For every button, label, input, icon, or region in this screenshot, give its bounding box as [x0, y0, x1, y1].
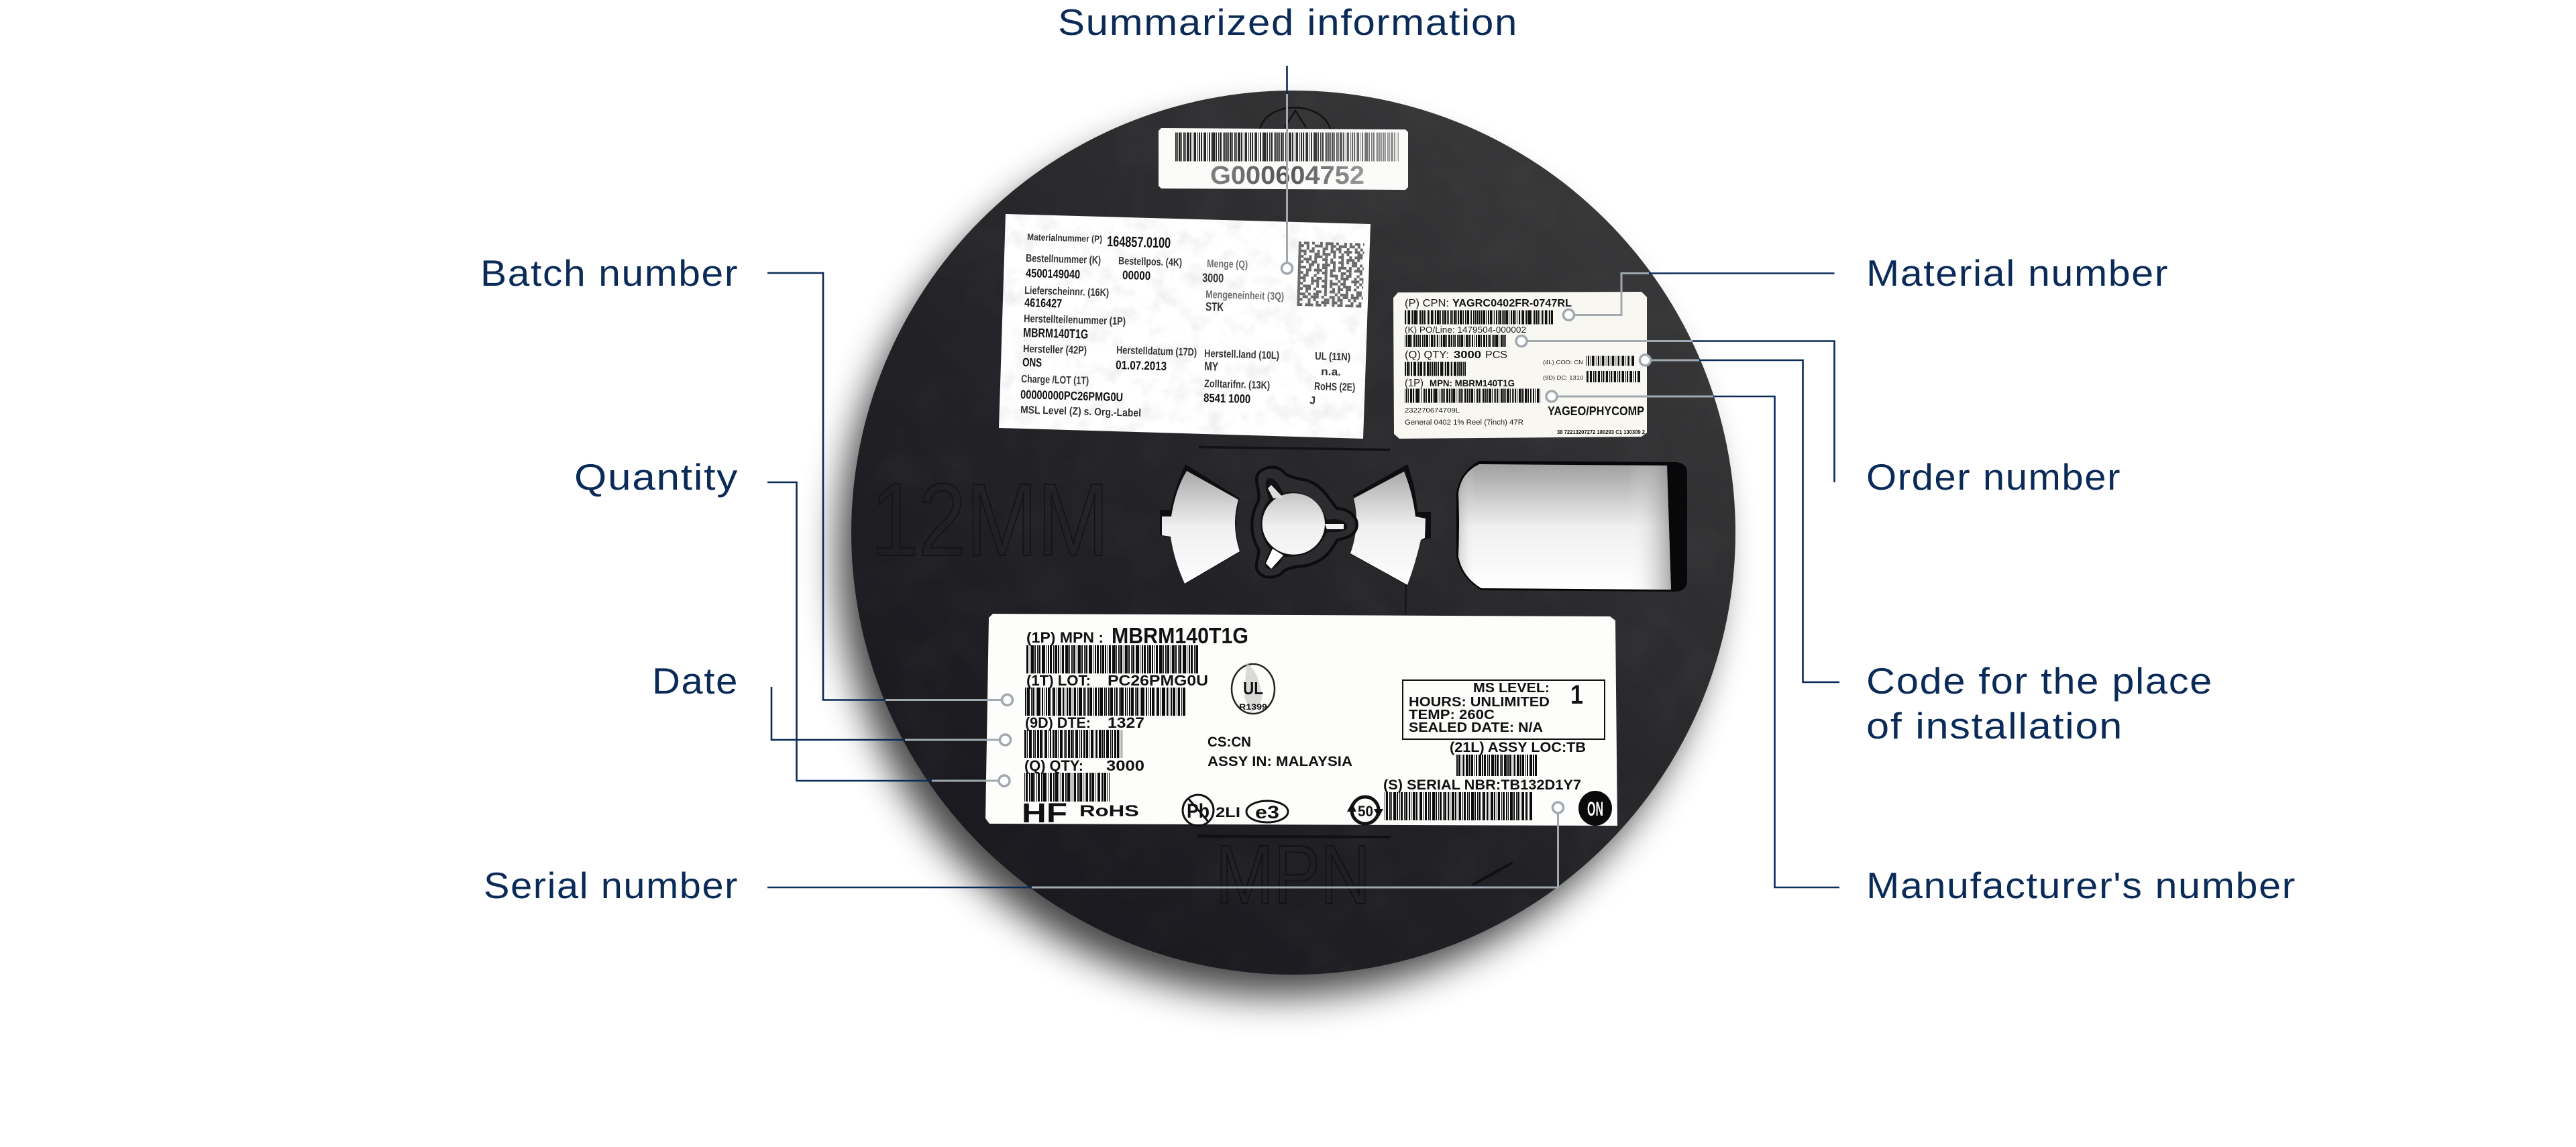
right Yageo label: 38 72213207272 180293 C1 130309 2 — [1557, 429, 1646, 435]
right Yageo label: (P) CPN: — [1405, 298, 1449, 309]
crack in reel — [1405, 585, 1406, 614]
left German delivery label: Menge (Q) — [1207, 258, 1248, 271]
callout line: Quantity — [767, 482, 1010, 786]
bottom manufacturer label: (S) SERIAL NBR:TB132D1Y7 — [1383, 777, 1581, 793]
bottom manufacturer label: 3000 — [1106, 757, 1144, 774]
moisture sensitivity box: HOURS: UNLIMITED — [1409, 695, 1550, 710]
left German delivery label: 3000 — [1202, 271, 1224, 285]
callout line: Serial number — [767, 802, 1563, 887]
left German delivery label: 00000 — [1122, 268, 1150, 282]
engraved text: MPN: MPN — [1216, 829, 1371, 922]
bottom manufacturer label: 2LI — [1216, 805, 1240, 820]
left German delivery label: MBRM140T1G — [1023, 326, 1088, 342]
label: Serial number: Serial number — [484, 865, 739, 906]
engraved arch at top — [1260, 107, 1330, 129]
left German delivery label: 8541 1000 — [1203, 391, 1250, 406]
left German delivery label: MSL Level (Z) s. Org.-Label — [1020, 404, 1141, 419]
moisture sensitivity box: 1 — [1570, 680, 1583, 710]
left German delivery label: RoHS (2E) — [1314, 381, 1355, 394]
bottom manufacturer label: (1P) MPN : — [1026, 629, 1104, 646]
left German delivery label: 4500149040 — [1026, 266, 1080, 281]
right Yageo label — [1393, 292, 1647, 439]
callout line: Manufacturer's number — [1546, 391, 1839, 887]
data matrix code — [1297, 243, 1364, 307]
moisture sensitivity box — [1403, 680, 1605, 739]
bottom manufacturer label: RoHS — [1079, 802, 1139, 820]
left wedge cutout — [1160, 464, 1240, 584]
bottom manufacturer label: (21L) ASSY LOC:TB — [1450, 740, 1586, 755]
icon: UL recognised mark: UL — [1243, 678, 1263, 698]
right wedge cutout — [1350, 464, 1431, 586]
right Yageo label: YAGEO/PHYCOMP — [1548, 404, 1644, 418]
left German delivery label: Zolltarifnr. (13K) — [1204, 378, 1270, 392]
callout line: Batch number — [767, 273, 1013, 706]
icon: ON Semiconductor logo: ON — [1587, 798, 1603, 820]
callout line: Order number — [1516, 335, 1834, 482]
right Yageo label: YAGRC0402FR-0747RL — [1452, 298, 1572, 309]
left German delivery label: n.a. — [1321, 366, 1341, 378]
callout line: Material number — [1563, 274, 1834, 321]
right Yageo label: (1P) — [1405, 378, 1424, 389]
left German delivery label: MY — [1204, 360, 1218, 374]
label: Date: Date — [652, 660, 739, 702]
rectangular window cutout — [1456, 461, 1687, 592]
label: Batch number: Batch number — [480, 252, 739, 294]
engraved text: 12MM: 12MM — [871, 462, 1109, 578]
icon: 50 year environmental mark: 50 — [1358, 803, 1373, 820]
icon: e3 mark: e3 — [1255, 802, 1279, 822]
bottom manufacturer label: 1327 — [1108, 714, 1144, 731]
left German delivery label: Bestellnummer (K) — [1026, 253, 1101, 266]
callout line: Summarized information — [1281, 66, 1292, 274]
bottom manufacturer label: HF — [1022, 798, 1067, 828]
left German delivery label: STK — [1205, 300, 1224, 314]
label: Material number: Material number — [1866, 252, 2169, 294]
left German delivery label: Herstellteilenummer (1P) — [1024, 313, 1126, 327]
callout line: Code for the place of installation — [1640, 355, 1839, 682]
reel shadow — [839, 117, 1717, 996]
left German delivery label: 01.07.2013 — [1116, 358, 1167, 373]
label: Code for the place of installation — [1866, 660, 2213, 747]
right Yageo label: 232270674709L — [1405, 406, 1460, 415]
left German delivery label: ONS — [1022, 356, 1042, 370]
left German delivery label: Charge /LOT (1T) — [1021, 374, 1089, 387]
bottom manufacturer label: PC26PMG0U — [1108, 672, 1208, 689]
left German delivery label: J — [1309, 395, 1316, 406]
left German delivery label: Lieferscheinnr. (16K) — [1024, 285, 1109, 299]
left German delivery label: Hersteller (42P) — [1023, 343, 1087, 357]
bottom manufacturer label: MBRM140T1G — [1112, 623, 1248, 648]
right Yageo label: MPN: MBRM140T1G — [1430, 378, 1515, 388]
left German delivery label — [996, 211, 1373, 441]
left German delivery label: Herstelldatum (17D) — [1116, 345, 1197, 358]
left German delivery label: 164857.0100 — [1107, 233, 1171, 252]
right Yageo label: (4L) COO: CN — [1543, 360, 1583, 366]
label: Order number: Order number — [1866, 456, 2121, 498]
right Yageo label: General 0402 1% Reel (7inch) 47R — [1405, 419, 1523, 427]
moisture sensitivity box: MS LEVEL: — [1473, 681, 1550, 696]
icon: lead free: Pb — [1187, 800, 1210, 822]
bottom manufacturer label: (9D) DTE: — [1025, 714, 1091, 731]
bottom manufacturer label: ASSY IN: MALAYSIA — [1208, 754, 1352, 769]
bottom manufacturer label — [985, 614, 1617, 828]
icon: ON Semiconductor logo — [1578, 791, 1612, 826]
left German delivery label: Bestellpos. (4K) — [1118, 256, 1182, 269]
top barcode sticker — [1159, 128, 1408, 190]
left German delivery label: 00000000PC26PMG0U — [1020, 388, 1123, 404]
moisture sensitivity box: TEMP: 260C — [1409, 708, 1495, 722]
icon: lead free — [1183, 795, 1214, 826]
engraved rule above hub — [1199, 447, 1390, 449]
label: Manufacturer's number: Manufacturer's number — [1866, 865, 2296, 906]
bottom manufacturer label: CS:CN — [1208, 734, 1251, 750]
right Yageo label: 3000 — [1454, 349, 1481, 361]
top barcode sticker: G000604752 — [1210, 162, 1364, 190]
engraved text: MPN — [1197, 829, 1511, 922]
left German delivery label: Mengeneinheit (3Q) — [1205, 289, 1284, 303]
hub with trilobe recess — [1252, 468, 1357, 577]
left German delivery label: UL (11N) — [1315, 351, 1350, 363]
label: Code for the place of installation: Code for the place — [1866, 660, 2213, 702]
right Yageo label: (Q) QTY: — [1405, 349, 1449, 361]
right Yageo label: (9D) DC: 1310 — [1543, 375, 1584, 381]
right Yageo label: PCS — [1485, 349, 1507, 361]
label: Code for the place of installation: of installation — [1866, 705, 2123, 747]
moisture sensitivity box: SEALED DATE: N/A — [1409, 720, 1543, 735]
icon: UL recognised mark — [1232, 663, 1275, 714]
left German delivery label: Herstell.land (10L) — [1204, 348, 1279, 362]
right Yageo label: (K) PO/Line: 1479504-000002 — [1405, 325, 1526, 335]
heading label: Summarized information: Summarized information — [1058, 1, 1518, 43]
label: Quantity: Quantity — [574, 456, 739, 498]
bottom manufacturer label: (Q) QTY: — [1024, 757, 1083, 774]
reel disc — [851, 90, 1736, 975]
bottom manufacturer label: (1T) LOT: — [1026, 672, 1091, 689]
icon: e3 mark — [1246, 801, 1288, 822]
left German delivery label: 4616427 — [1024, 296, 1062, 311]
icon: UL recognised mark: R1399 — [1239, 702, 1267, 712]
callout line: Date — [771, 687, 1010, 745]
icon: 50 year environmental mark — [1347, 797, 1383, 824]
left German delivery label: Materialnummer (P) — [1027, 231, 1102, 244]
